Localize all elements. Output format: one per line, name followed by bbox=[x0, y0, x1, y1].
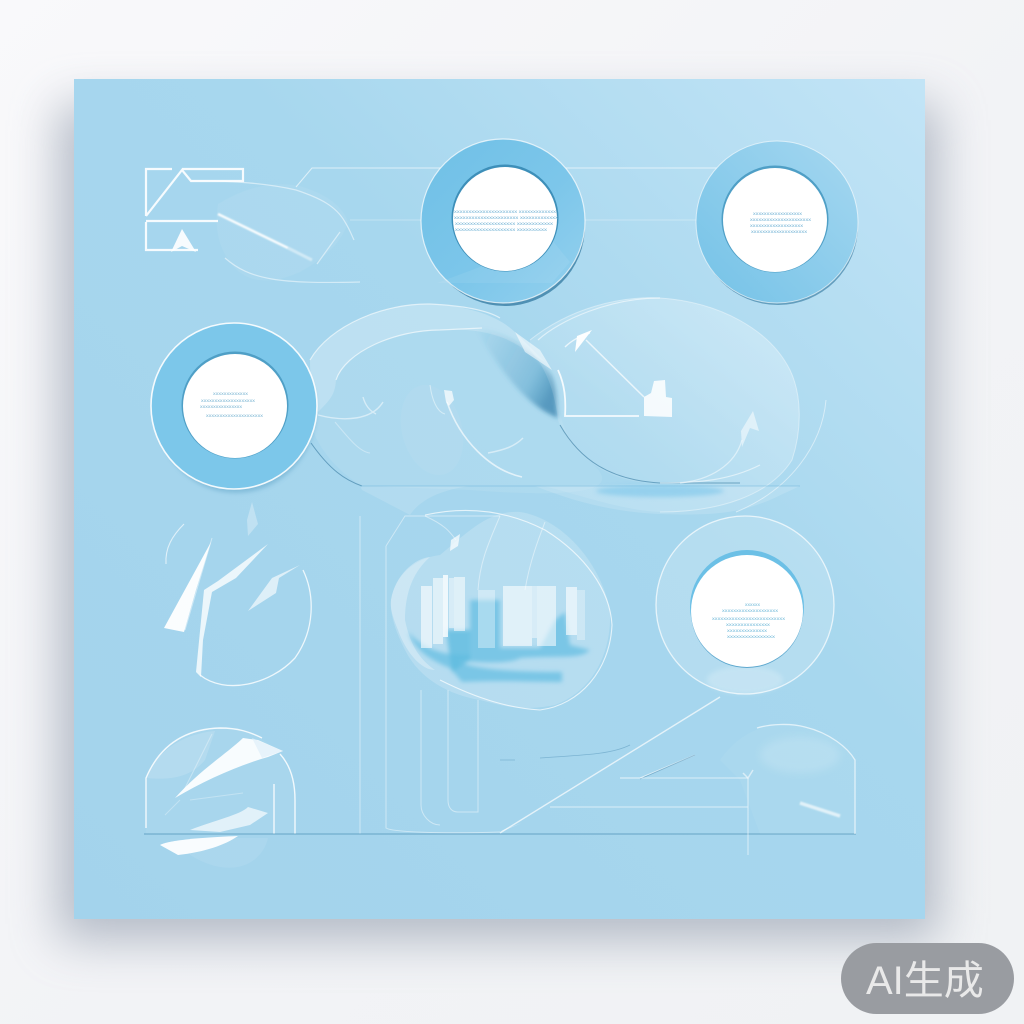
dome: right bbox=[720, 725, 855, 834]
microtext lines bbox=[750, 211, 812, 234]
left mid icon: shards in circle bbox=[164, 502, 311, 686]
circle badge: top right bbox=[696, 141, 858, 305]
crease shadow bbox=[475, 327, 558, 418]
microtext lines: xxxxxxxxxxxxxxxxxxxx bbox=[751, 229, 808, 234]
outline column bbox=[360, 516, 500, 834]
blue wash bbox=[408, 600, 590, 682]
microtext lines: xxxxxxxxxxxxxxxxxxxx bbox=[201, 398, 256, 403]
small curved arrows over chart bbox=[425, 516, 545, 590]
bars bbox=[421, 575, 585, 648]
microtext lines: xxxxxx bbox=[745, 602, 761, 607]
microtext lines bbox=[454, 209, 559, 232]
circle badge: top centre bbox=[421, 139, 585, 306]
blob bbox=[391, 512, 610, 708]
top-left diagram: frame and glass shape bbox=[146, 168, 720, 282]
microtext lines: xxxxxxxxxxxxxxxx bbox=[200, 404, 243, 409]
microtext lines: xxxxxxxxxxxxxxxxxxx bbox=[750, 223, 804, 228]
microtext lines: xxxxxxxxxxxxxxxxxxxx xxxxxxxxxxxx bbox=[455, 221, 554, 226]
lower glass ledge bbox=[360, 486, 800, 515]
bar chart in glass blob bbox=[360, 510, 612, 834]
microtext lines: xxxxxxxxxxxxxxxxxxxx bbox=[722, 608, 779, 613]
microtext lines: xxxxxxxxxxxxxxxxxx bbox=[753, 211, 803, 216]
bottom-left dome with shards bbox=[146, 728, 295, 868]
microtext lines bbox=[712, 602, 786, 639]
microtext lines: xxxxxxxxxxxxxxx bbox=[726, 622, 771, 627]
central overlapping glass lenses bbox=[310, 298, 826, 515]
main blue panel bbox=[74, 79, 925, 919]
baseline with diagonal and right dome bbox=[144, 697, 856, 855]
microtext lines: xxxxxxxxxxxxxxxxxxxxx bbox=[206, 413, 264, 418]
watermark badge: AI生成 bbox=[866, 959, 984, 1003]
microtext lines: xxxxxxxxxxxxxxxxxxxxxx xxxxxxxxxxxxx bbox=[454, 215, 559, 220]
microtext lines: xxxxxxxxxxxxxxxx bbox=[727, 634, 776, 639]
circle badge: middle left bbox=[151, 323, 317, 493]
lens band: left upper rim bbox=[310, 304, 545, 412]
lens: left bbox=[310, 304, 602, 493]
microtext lines: xxxxxxxxxxxxxxxxxxxxxxxxxx bbox=[712, 616, 786, 621]
circle badge: lower right glass bbox=[656, 516, 834, 694]
microtext lines: xxxxxxxxxxxxxxxxxxxxxx bbox=[750, 217, 812, 222]
microtext lines bbox=[200, 391, 264, 418]
microtext lines: xxxxxxxxxxxxxxxxxxxx xxxxxxxxxx bbox=[455, 227, 548, 232]
lens: right bbox=[530, 298, 799, 512]
icon: small triangle bbox=[171, 229, 196, 252]
microtext lines: xxxxxxxxxxxxxx bbox=[727, 628, 768, 633]
arrow: left lens curved bbox=[318, 378, 523, 482]
watermark badge bbox=[841, 943, 1014, 1014]
microtext lines: xxxxxxxxxxxxxxxxxxxxxx xxxxxxxxxxxxx bbox=[454, 209, 557, 214]
panel shadow bbox=[58, 104, 938, 940]
arrow: right lens curved bbox=[680, 411, 759, 483]
arrow: right lens triangle bbox=[558, 330, 672, 417]
microtext lines: xxxxxxxxxxxxx bbox=[213, 391, 249, 396]
